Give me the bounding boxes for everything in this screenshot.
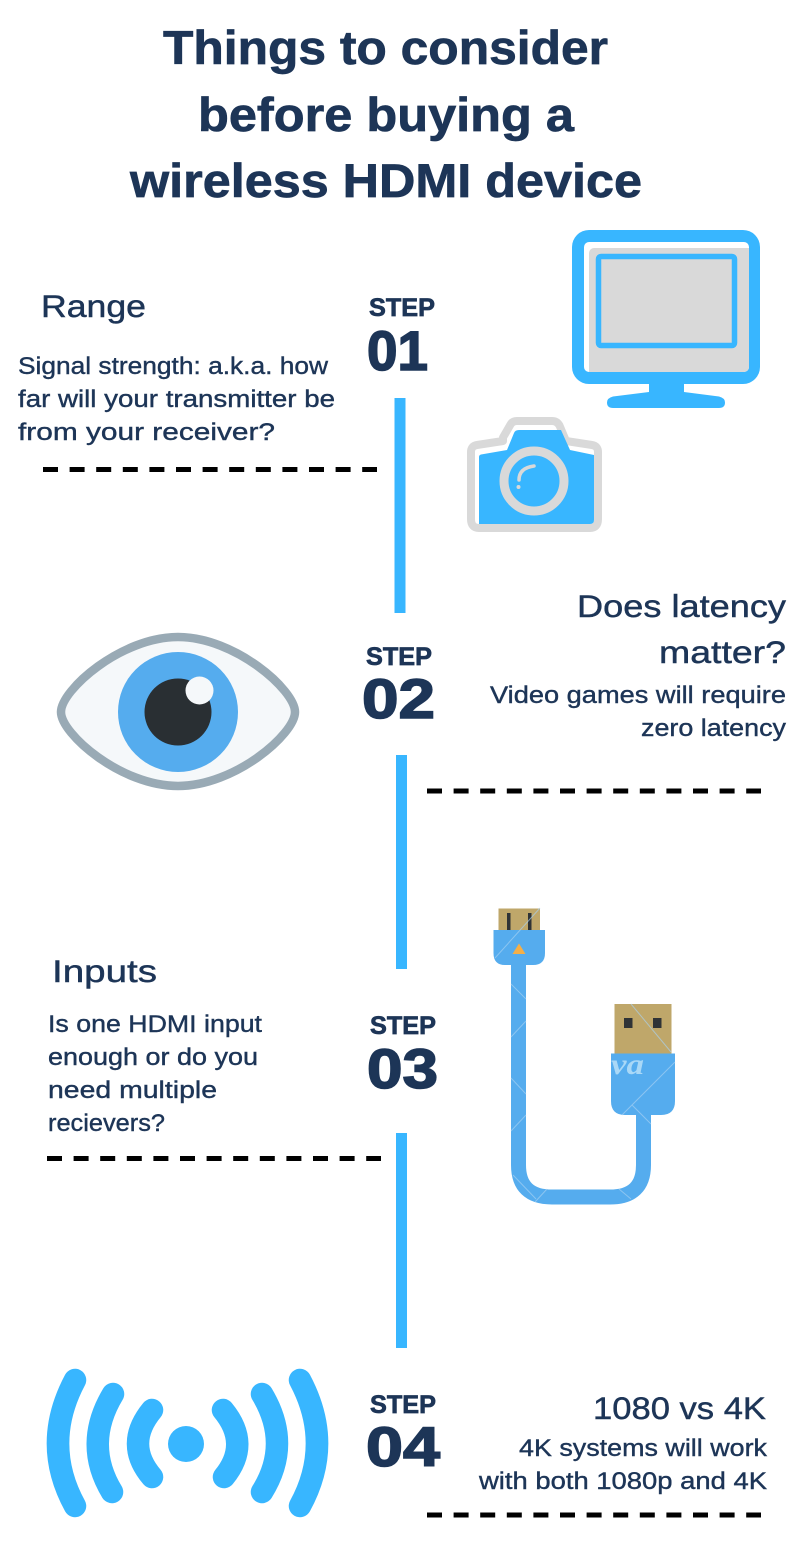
step 01 label: STEP (369, 294, 435, 322)
step 04 label: 04 (366, 1415, 440, 1478)
icon: usb cable (494, 908, 675, 1202)
step 04 label (366, 1391, 440, 1478)
panel: range (18, 288, 377, 470)
timeline bar 3 (396, 1133, 407, 1348)
heading: latency (577, 588, 786, 670)
panel: resolution (427, 1390, 768, 1515)
step 03 label: STEP (370, 1012, 436, 1040)
text: inputs description: enough or do you (48, 1044, 258, 1071)
step 02 label (362, 643, 435, 730)
icon: wireless signal (58, 1380, 317, 1506)
step 01 label: 01 (367, 319, 428, 382)
title: wireless HDMI device (129, 154, 642, 207)
panel: latency (427, 588, 786, 791)
heading: range: Range (41, 288, 146, 324)
title: Things to consider (163, 21, 608, 74)
heading: 1080 vs 4K: 1080 vs 4K (593, 1390, 766, 1426)
text: latency description: zero latency (641, 715, 786, 742)
step 02 label: 02 (362, 667, 435, 730)
title (129, 21, 642, 207)
text: inputs description: need multiple (48, 1077, 217, 1104)
text: resolution description: 4K systems will work (519, 1435, 768, 1462)
text: range description: Signal strength: a.k.a. how (18, 353, 329, 380)
heading: latency: matter? (659, 634, 786, 670)
text: latency description: Video games will require (490, 682, 786, 709)
text: range description: from your receiver? (18, 419, 275, 446)
text: inputs description: Is one HDMI input (48, 1011, 262, 1038)
step 03 label: 03 (367, 1037, 438, 1100)
step 02 label: STEP (366, 643, 432, 671)
text: inputs description: recievers? (48, 1110, 165, 1137)
step 01 label (367, 294, 435, 382)
text: range description: far will your transmitter be (18, 386, 335, 413)
icon: camera (471, 421, 598, 528)
heading: inputs: Inputs (52, 953, 157, 989)
text: resolution description: with both 1080p and 4K (478, 1468, 767, 1495)
step 04 label: STEP (370, 1391, 436, 1419)
watermark glyphs: va (611, 1048, 644, 1081)
icon: monitor (572, 230, 760, 408)
text: resolution description (478, 1435, 768, 1495)
text: latency description (490, 682, 786, 742)
title: before buying a (198, 88, 575, 141)
timeline bar 1 (394, 398, 406, 613)
icon: eye (61, 637, 295, 786)
step 03 label (367, 1012, 438, 1100)
timeline bar 2 (396, 755, 407, 969)
text: inputs description (48, 1011, 262, 1137)
text: range description (18, 353, 335, 446)
panel: inputs (47, 953, 381, 1158)
heading: latency: Does latency (577, 588, 786, 624)
